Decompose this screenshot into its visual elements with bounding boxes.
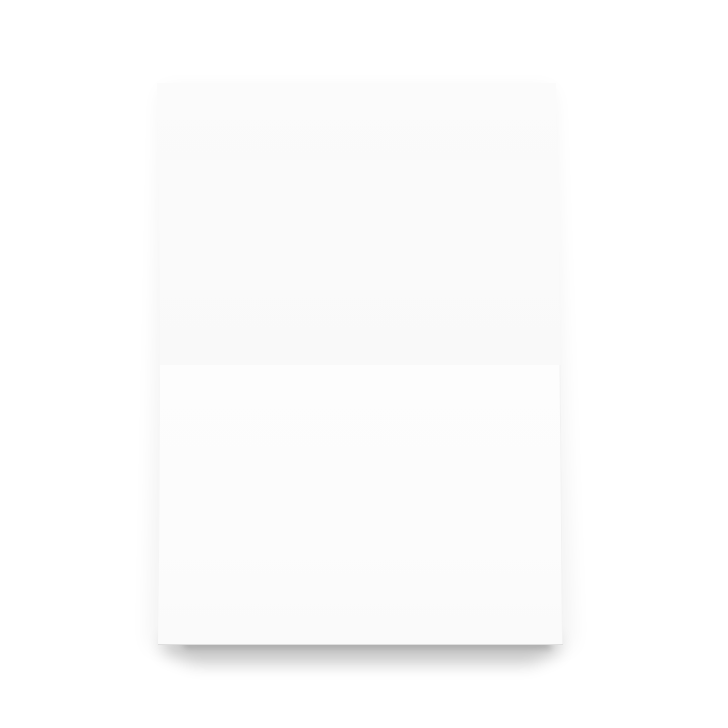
bottom cast shadow — [162, 636, 560, 664]
bottom contact shadow — [180, 640, 552, 649]
card bottom edge — [158, 644, 563, 645]
card upper panel — [157, 83, 560, 365]
card lower panel — [158, 365, 563, 644]
card right edge highlight — [560, 365, 563, 644]
soft ambient shadow around card — [150, 90, 572, 648]
